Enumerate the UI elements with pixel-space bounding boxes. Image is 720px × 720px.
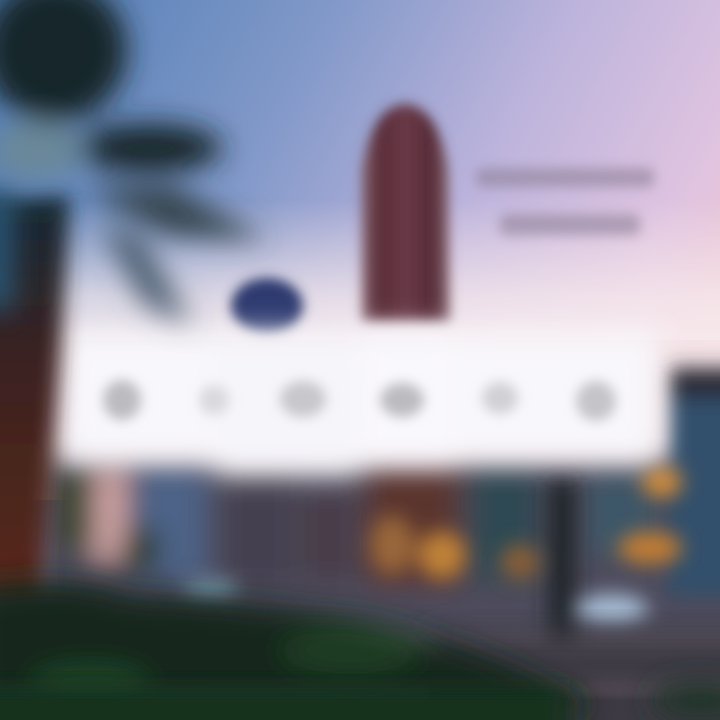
dark road strip	[430, 630, 720, 700]
right-side building	[548, 368, 720, 650]
icon 4	[380, 383, 424, 417]
icon 6	[576, 381, 616, 421]
warm window lights	[182, 467, 682, 626]
icon 5	[482, 382, 518, 414]
icon 2	[199, 385, 229, 415]
skyline buildings	[40, 460, 720, 650]
icon 1	[103, 380, 141, 420]
shrub base at frame edge	[0, 670, 570, 720]
domed building	[231, 278, 303, 334]
foreground shrubs	[0, 581, 720, 720]
palm trunk	[0, 195, 70, 610]
tall tower	[362, 104, 450, 322]
road base at frame edge	[430, 670, 720, 720]
palm fronds	[0, 0, 268, 325]
heading text	[476, 168, 654, 235]
foreground palm tree	[0, 0, 268, 610]
icon 3	[280, 381, 326, 417]
panel: white info band	[62, 330, 658, 475]
icon row in panel	[103, 380, 616, 421]
